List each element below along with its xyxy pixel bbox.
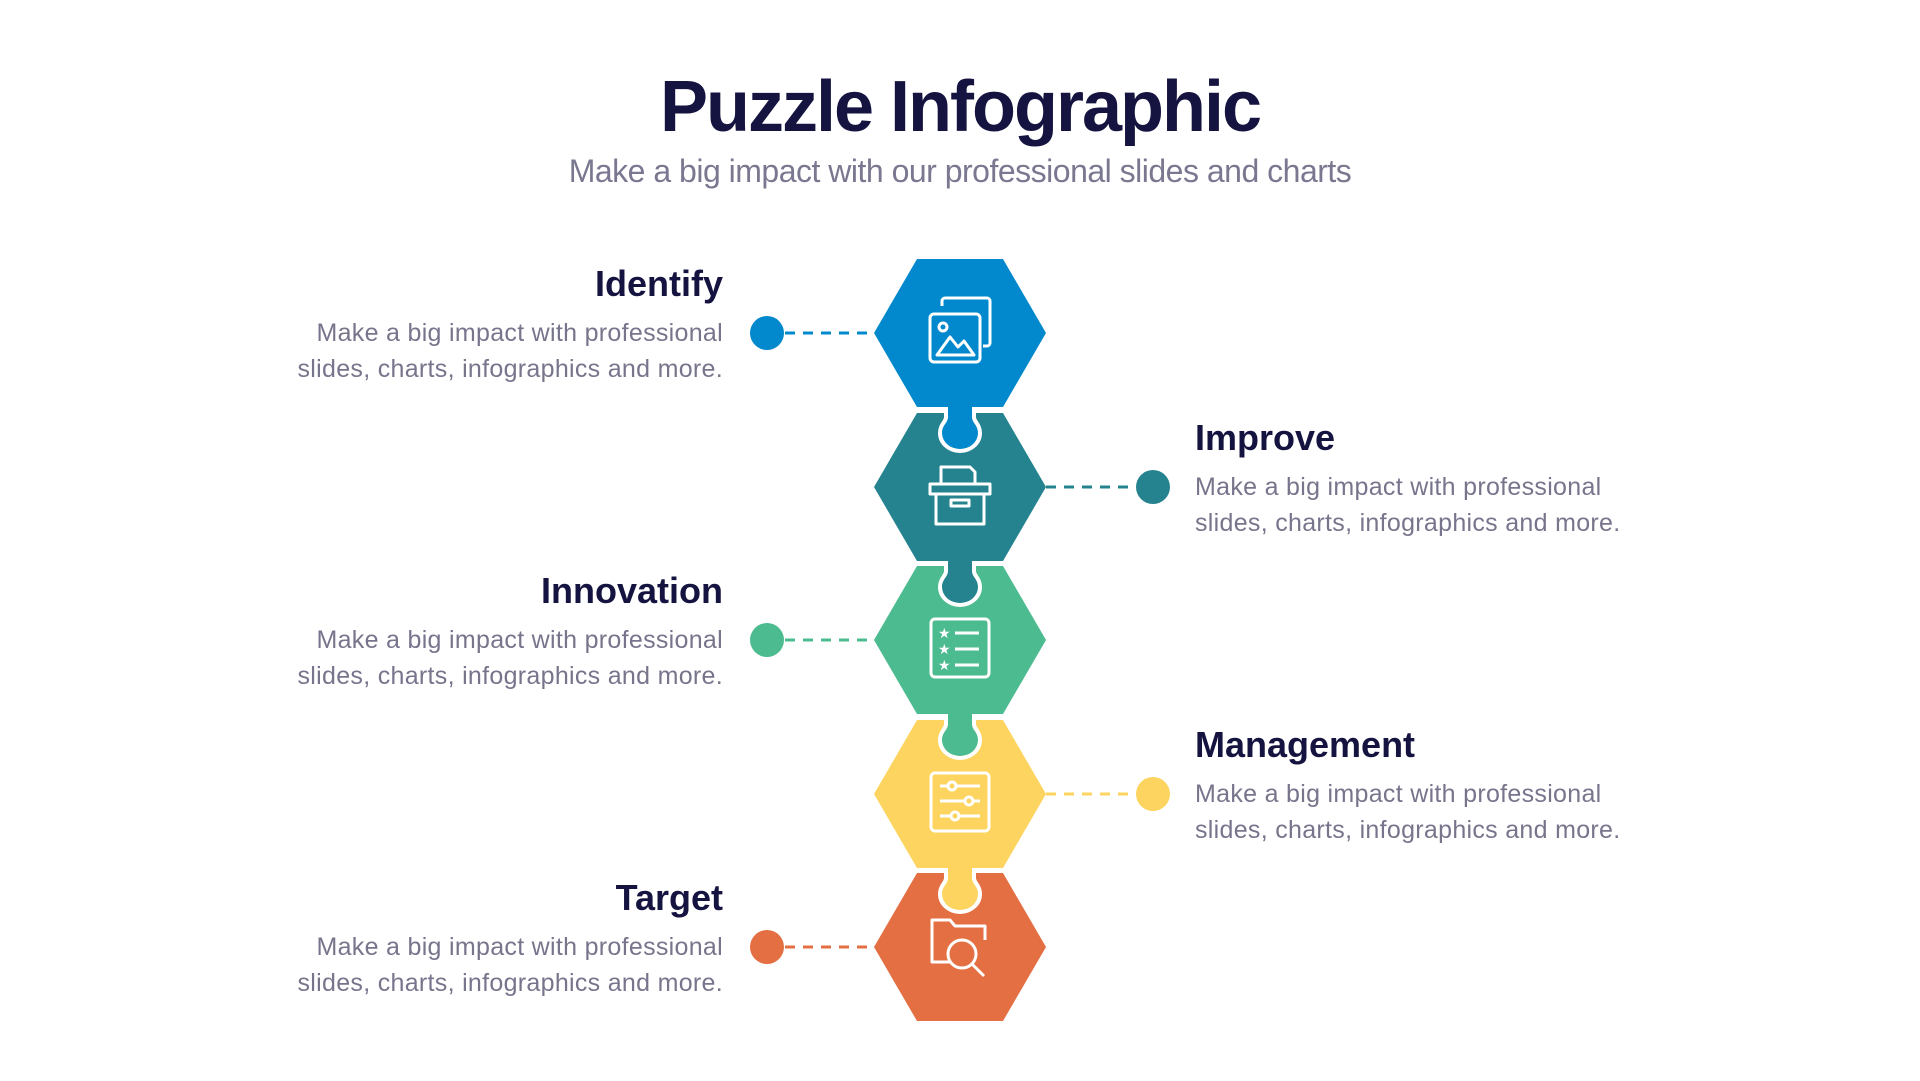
text: Target: Make a big impact with professional [316, 933, 723, 961]
text: Improve: Make a big impact with professional [1195, 473, 1602, 501]
hexagons [874, 259, 1046, 1021]
puzzle chart [750, 259, 1170, 1021]
text: Management [1195, 724, 1620, 844]
icon: images [930, 298, 990, 362]
icon: archive box [930, 467, 990, 524]
text: Improve: Improve [1195, 417, 1335, 458]
text: Target [298, 877, 723, 997]
text: Management: Management [1195, 724, 1415, 765]
text: Innovation: slides, charts, infographics and more. [298, 662, 723, 690]
text: Improve [1195, 417, 1620, 537]
icon: checklist [931, 619, 989, 677]
text: Innovation [298, 570, 723, 690]
icon: checklist: ★ [938, 658, 951, 674]
text: Identify [298, 263, 723, 383]
icon: checklist: ★ [938, 626, 951, 642]
icon: sliders [931, 773, 989, 831]
connectors [785, 333, 1136, 947]
text: Innovation: Make a big impact with professional [316, 626, 723, 654]
text: Improve: slides, charts, infographics and more. [1195, 509, 1620, 537]
text: Identify: slides, charts, infographics and more. [298, 355, 723, 383]
dots [750, 316, 1170, 964]
text: Management: Make a big impact with professional [1195, 780, 1602, 808]
title: Puzzle Infographic [660, 67, 1260, 147]
text: Innovation: Innovation [541, 570, 723, 611]
text: Identify: Identify [595, 263, 723, 304]
text: Target: slides, charts, infographics and more. [298, 969, 723, 997]
text: Identify: Make a big impact with professional [316, 319, 723, 347]
icon: folder search [932, 920, 985, 976]
icon: checklist: ★ [938, 642, 951, 658]
puzzle tabs [942, 403, 978, 910]
text: Management: slides, charts, infographics and more. [1195, 816, 1620, 844]
text: Target: Target [616, 877, 723, 918]
subtitle: Make a big impact with our professional slides and charts [569, 153, 1351, 189]
